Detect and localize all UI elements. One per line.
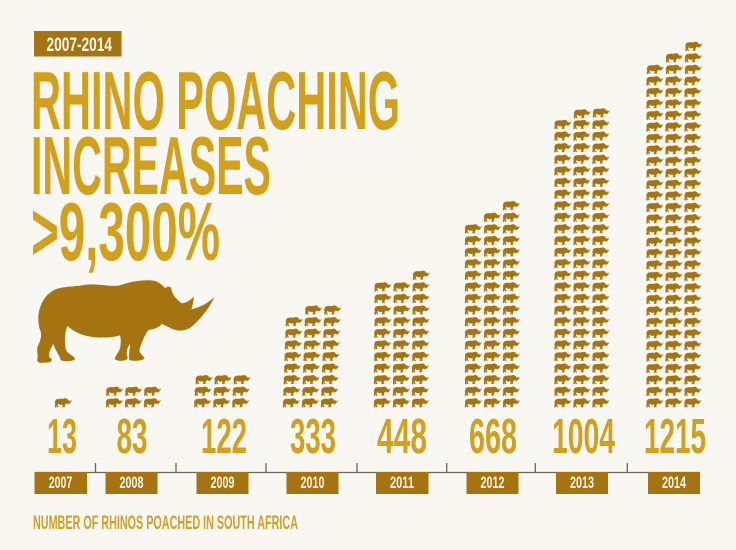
yearly totals: 668 (469, 410, 517, 464)
bar: 2012 rhinos (465, 201, 520, 407)
bar: 2008 rhinos (106, 387, 161, 407)
year labels: 2009 (210, 473, 234, 492)
date range badge: 2007-2014 (46, 35, 112, 56)
year labels: 2011 (390, 473, 414, 492)
yearly totals: 1004 (552, 410, 615, 464)
year labels: 2012 (480, 473, 504, 492)
caption: NUMBER OF RHINOS POACHED IN SOUTH AFRICA (33, 513, 298, 534)
bar: 2007 rhinos (55, 398, 72, 407)
yearly totals (47, 410, 706, 464)
icon: large rhino silhouette (37, 280, 215, 363)
timeline axis (35, 463, 700, 472)
date range badge (34, 31, 122, 56)
bar: 2013 rhinos (554, 108, 610, 407)
bar: 2011 rhinos (374, 271, 430, 407)
year labels (34, 472, 700, 494)
yearly totals: 122 (201, 410, 247, 464)
year labels: 2013 (570, 473, 594, 492)
year labels: 2008 (120, 473, 144, 492)
title: >9,300% (31, 185, 220, 278)
year labels: 2014 (662, 473, 686, 492)
bar: 2009 rhinos (194, 375, 250, 407)
yearly totals: 13 (47, 410, 77, 464)
title (31, 54, 400, 278)
yearly totals: 83 (116, 410, 148, 464)
year labels: 2010 (300, 473, 324, 492)
bar: 2010 rhinos (283, 306, 341, 407)
yearly totals: 448 (377, 410, 427, 464)
bar: 2014 rhinos (646, 42, 702, 407)
year labels: 2007 (49, 473, 72, 492)
yearly totals: 333 (290, 410, 336, 464)
title: INCREASES (31, 119, 271, 212)
